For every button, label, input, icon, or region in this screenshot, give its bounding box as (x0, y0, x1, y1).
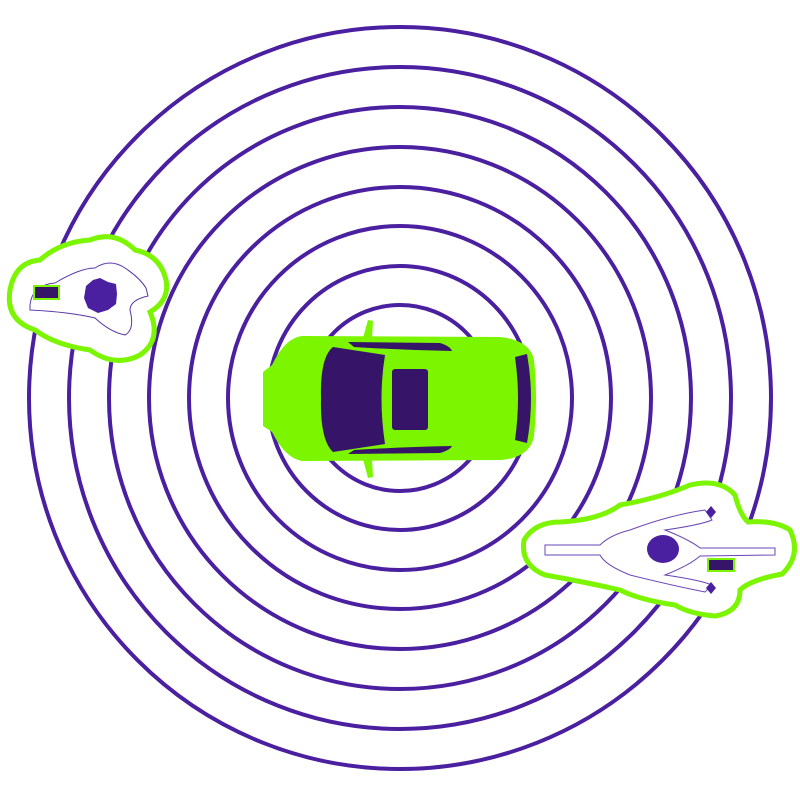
car (263, 320, 536, 478)
pedestrian left with phone (9, 237, 167, 360)
pedestrian right with phone (523, 483, 794, 616)
